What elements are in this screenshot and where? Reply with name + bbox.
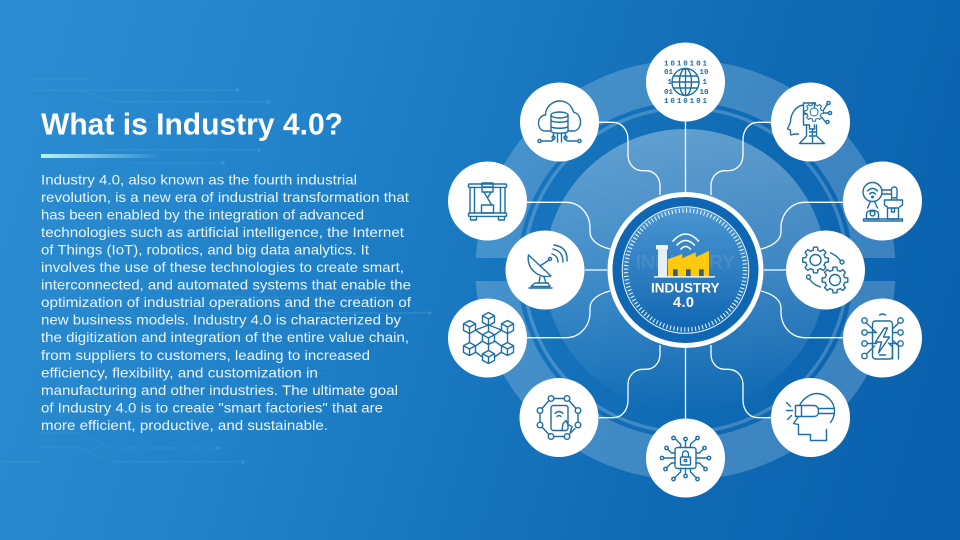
body text block: revolution, is a new era of industrial transformation that xyxy=(41,189,409,205)
body text block: from suppliers to customers, leading to increased xyxy=(41,347,370,363)
body text block: of Industry 4.0 is to create "smart factories" that are xyxy=(41,399,383,415)
body text block: more efficient, productive, and sustainable. xyxy=(41,417,328,433)
central hub: Industry 4.0 xyxy=(610,194,761,346)
icon node: AI head xyxy=(771,82,850,162)
icon node: 3D printer xyxy=(448,162,527,240)
icon node: global data: 1 xyxy=(668,79,672,87)
body text block: new business models. Industry 4.0 is characterized by xyxy=(41,312,401,328)
icon node: smartphone network xyxy=(520,378,598,457)
icon node: blockchain cubes xyxy=(448,298,527,378)
body text block: of Things (IoT), robotics, and big data analytics. It xyxy=(41,242,369,258)
icon node: phone bolt network xyxy=(843,298,922,378)
connector lines xyxy=(527,121,844,419)
body text block: involves the use of these technologies to create smart, xyxy=(41,259,404,275)
icon node: global data: 01 xyxy=(664,89,674,97)
concentric background rings xyxy=(496,81,874,459)
icon node: chip security lock xyxy=(646,418,725,498)
icon node: cloud database xyxy=(520,82,599,162)
icon node: VR headset xyxy=(771,378,850,457)
icon node: global data: 1010101 xyxy=(664,60,707,68)
icon node: satellite dish xyxy=(506,230,584,310)
central hub: Industry 4.0: INDUSTRY xyxy=(636,252,736,274)
background circuit lines xyxy=(0,79,432,464)
body text block: the digitization and integration of the entire value chain, xyxy=(41,329,409,345)
icon node: robot arm with wifi xyxy=(843,162,922,240)
icon node: gears xyxy=(786,230,865,310)
icon node: global data: 1 xyxy=(702,79,708,87)
body text block: manufacturing and other industries. The ultimate goal xyxy=(41,382,398,398)
body text block: Industry 4.0, also known as the fourth industrial xyxy=(41,171,357,187)
body text block: interconnected, and automated systems that enable the xyxy=(41,277,411,293)
icon node: global data: 10 xyxy=(700,89,709,97)
central hub: Industry 4.0: 4.0 xyxy=(673,295,694,311)
icon node: global data: 01 xyxy=(664,69,674,77)
icon node: global data: 1010101 xyxy=(664,98,707,106)
icon node: global data xyxy=(646,42,725,122)
body text block: optimization of industrial operations and the creation of xyxy=(41,294,411,310)
body text block xyxy=(41,171,411,433)
title: What is Industry 4.0? xyxy=(41,106,343,142)
icon: wifi signal xyxy=(673,234,698,249)
icon node: global data: 10 xyxy=(700,69,709,77)
inner gradient disc xyxy=(544,129,826,411)
body text block: has been enabled by the integration of advanced xyxy=(41,206,364,222)
hub label: INDUSTRY xyxy=(651,281,720,296)
body text block: efficiency, flexibility, and customization in xyxy=(41,364,318,380)
title underline xyxy=(41,154,161,158)
icon: factory xyxy=(654,245,715,278)
body text block: technologies such as artificial intelligence, the Internet xyxy=(41,224,404,240)
